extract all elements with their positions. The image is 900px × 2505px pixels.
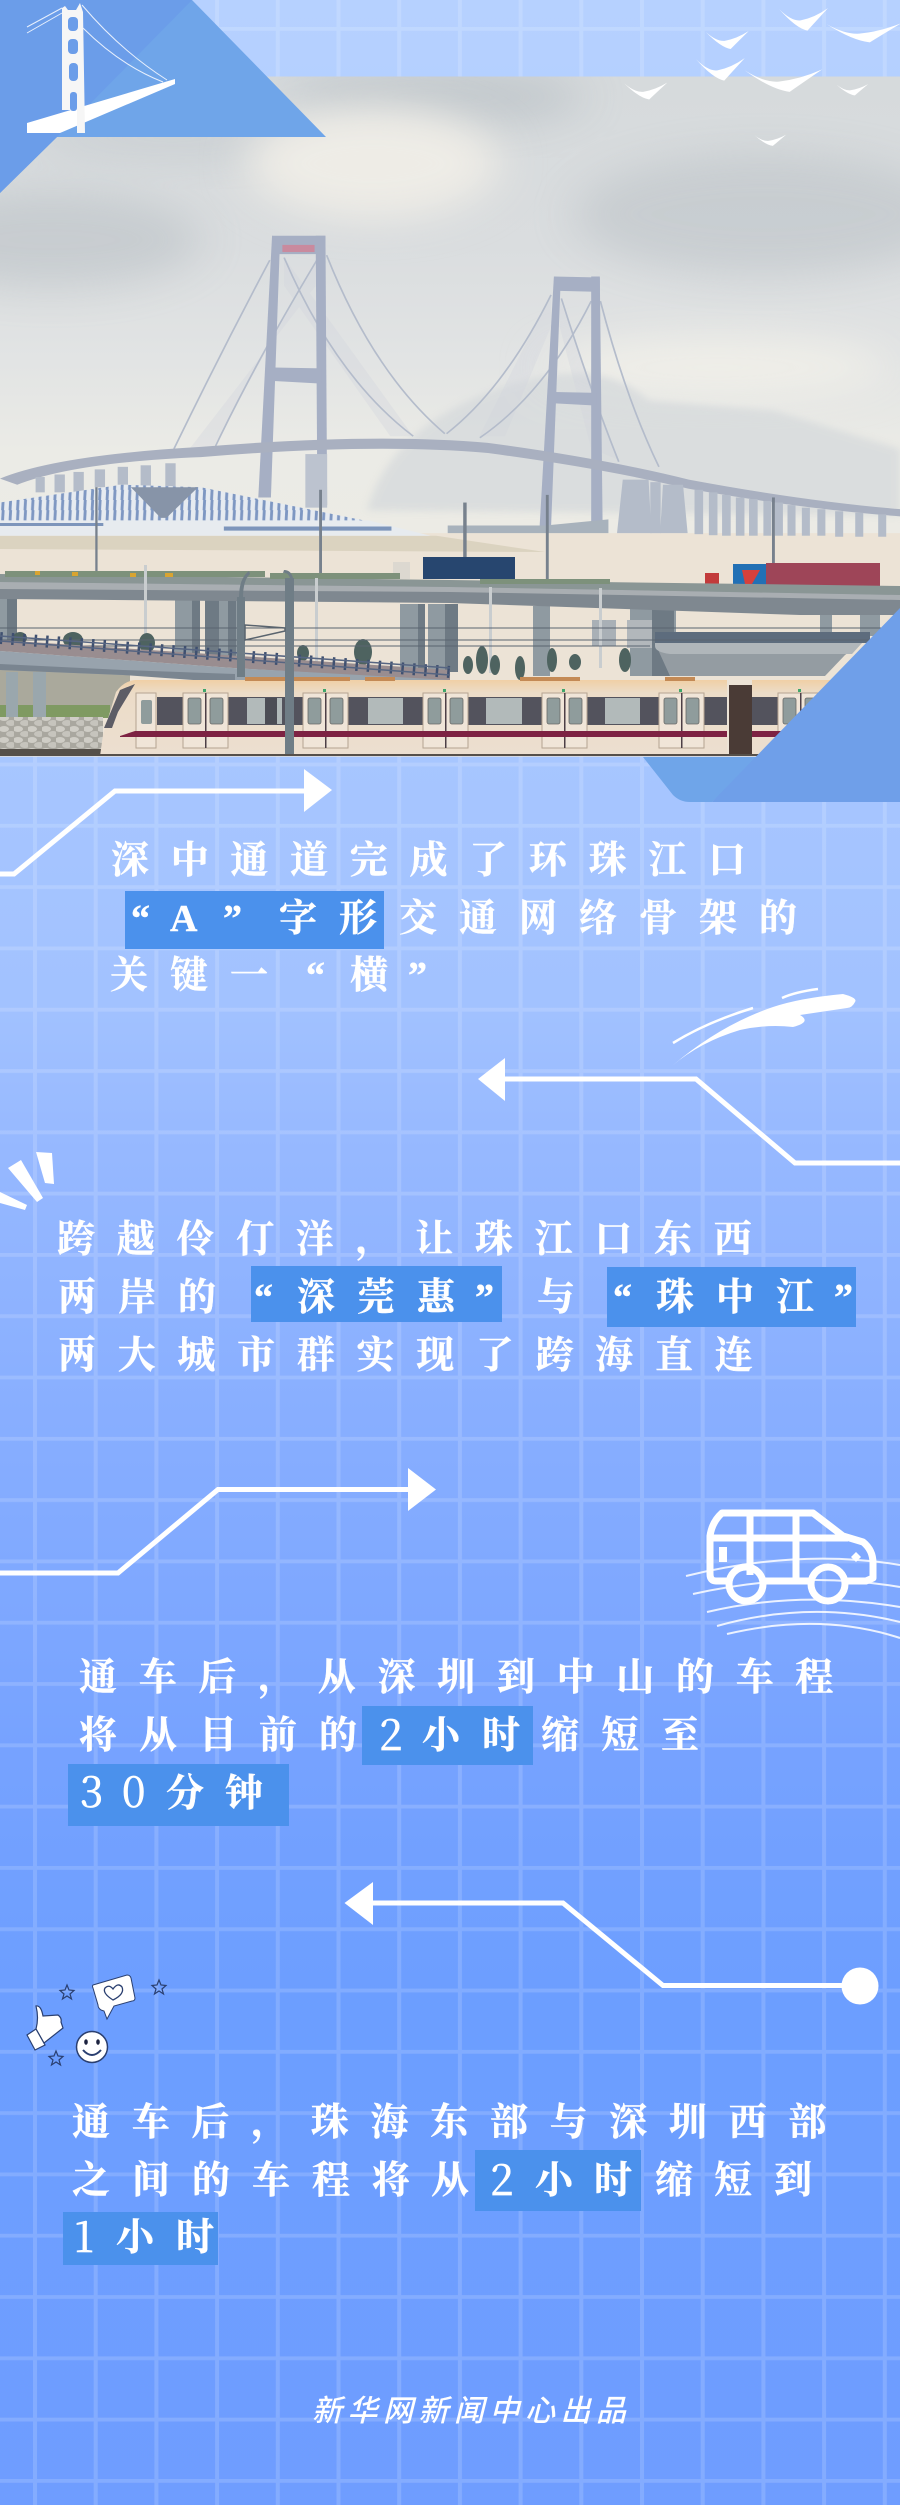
line 3: 小时 [116, 2217, 214, 2259]
line 2: 将从目前的小时缩短至 [79, 1715, 699, 1757]
number 2: 2 [379, 1703, 402, 1763]
lower road and shoreline [0, 636, 450, 756]
speech bubble with heart [92, 1975, 135, 2019]
photo: Shenzhen-Zhongshan link bridge with train [0, 66, 900, 758]
thumbs up [36, 2006, 63, 2043]
decorative triangle: top left [0, 0, 326, 193]
number 30: 30 [80, 1760, 145, 1820]
icon: car [686, 1513, 900, 1638]
icon: flock of birds [624, 8, 900, 146]
trucks on the highway [393, 557, 880, 586]
text block 4 [63, 2102, 848, 2265]
highlight: 2 hours [362, 1706, 533, 1765]
number 1: 1 [74, 2205, 94, 2265]
highlight: 1 hour [63, 2212, 218, 2265]
highlight: Shen Guan Hui [251, 1266, 502, 1322]
line 2: 之间的车程将从小时缩短到 [72, 2160, 812, 2202]
heart [104, 1985, 123, 2000]
line 1: 跨越伶仃洋，让珠江口东西 [57, 1219, 773, 1262]
icon: social thumbs, heart bubble, smiley, stars [27, 1975, 166, 2065]
arrow 2 [478, 1058, 900, 1163]
line 1: 通车后，从深圳到中山的车程 [79, 1657, 855, 1700]
lamp posts and trees [0, 565, 900, 680]
decorative triangle: bottom right [643, 608, 900, 802]
smiley [76, 2032, 108, 2062]
highlight: Zhu Zhong Jiang [607, 1267, 856, 1327]
highway and piers [0, 571, 900, 676]
arrow 4 [344, 1882, 878, 2004]
highlight: 30 minutes [68, 1764, 289, 1826]
icon: bridge [27, 3, 175, 133]
icon: emphasis ticks [0, 1152, 54, 1210]
text block 3 [68, 1657, 855, 1826]
circle end point [842, 1968, 878, 2004]
catenary poles [237, 570, 294, 754]
line 2: “A”字形交通网络骨架的 [131, 898, 797, 940]
train [100, 677, 832, 756]
text block 2 [57, 1219, 856, 1377]
line 1: 深中通道完成了环珠江口 [111, 840, 768, 882]
sky, distant bridge and shore [0, 66, 900, 758]
line 3: 两大城市群实现了跨海直连 [58, 1335, 774, 1377]
icon: brush flourish [672, 989, 856, 1066]
text block 1 [110, 840, 797, 997]
arrow 1 [0, 769, 332, 874]
line 3: 分钟 [166, 1773, 263, 1815]
highlight: A shape [125, 891, 384, 949]
line 3: 关键一“横” [110, 955, 427, 997]
highlight: 2 hours [475, 2150, 641, 2211]
footer credit: 新华网新闻中心出品 [312, 2395, 632, 2428]
arrow 3 [0, 1468, 436, 1573]
stars [49, 1980, 166, 2065]
number 2: 2 [490, 2148, 513, 2208]
line 1: 通车后，珠海东部与深圳西部 [72, 2102, 848, 2145]
line 2: 两岸的“深莞惠”与“珠中江” [58, 1277, 853, 1319]
cuff [27, 2029, 45, 2050]
